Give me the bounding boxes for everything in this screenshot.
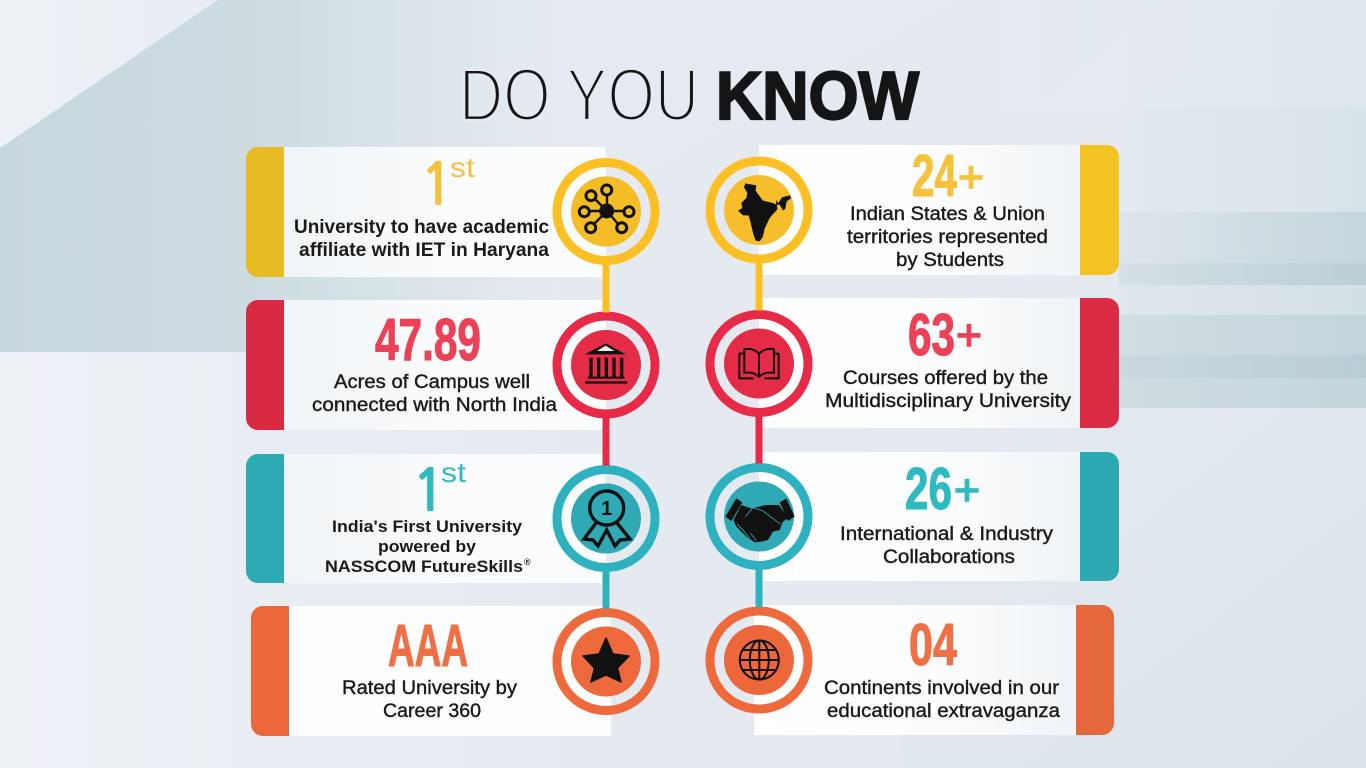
title: bold word: KNOW [716,58,920,134]
stat: 1st: 1 [411,462,447,520]
stat: 24+: 24 [912,143,957,209]
card [759,452,1089,581]
description: ® [524,557,531,567]
colour tab [246,454,284,583]
icon: award ribbon in ring [557,470,655,568]
icon: open book in ring [710,314,808,412]
card [759,145,1089,275]
description: Indian States & Union [850,203,1045,225]
description [294,216,549,261]
connector: teal left [602,572,610,608]
colour tab [251,606,289,736]
card [759,298,1089,428]
description: International & Industry [840,523,1053,545]
card [270,300,606,430]
stat: 63+: 63 [908,302,955,368]
icon: award ribbon in ring: 1 [601,498,612,520]
colour tab [246,300,284,430]
connector: yellow left [602,264,610,312]
description: Multidisciplinary University [825,390,1071,412]
stat: 04: 04 [909,612,957,678]
description [342,677,517,722]
connector: red right [756,416,762,464]
description: NASSCOM FutureSkills [325,557,523,576]
stat: 1st [411,457,466,520]
panel: acres of campus [246,300,655,430]
description [840,523,1053,568]
icon: network in ring [557,162,655,260]
stat: 26+: + [954,466,980,515]
panel: courses offered [710,298,1119,428]
connector: red left [602,418,610,466]
stat: 1st [419,152,475,214]
title [459,54,920,136]
panel: first university IET [246,147,655,277]
description: affiliate with IET in Haryana [299,239,549,261]
description [825,367,1071,412]
panel: Indian states [710,143,1119,275]
description: by Students [896,249,1004,271]
icon: star in ring [557,612,655,710]
description [312,371,557,416]
icon: institution in ring [557,316,655,414]
stat: 1st: st [450,152,475,183]
description: Career 360 [383,700,481,722]
colour tab [1076,605,1114,735]
description [847,203,1048,271]
panel: NASSCOM first university [246,454,655,583]
stat: AAA: AAA [388,613,468,679]
description: educational extravaganza [827,700,1060,722]
description: connected with North India [312,394,557,416]
description: Collaborations [883,546,1015,568]
connector: teal right [756,570,762,607]
panel: collaborations [710,452,1119,581]
description: Continents involved in our [824,677,1060,699]
description: powered by [378,537,477,556]
stat: 1st: 1 [419,156,455,214]
description: Courses offered by the [843,367,1048,389]
colour tab [1080,145,1119,275]
colour tab [1080,298,1119,428]
stat: 24+: + [958,153,984,202]
stat: 47.89: 47.89 [375,307,481,373]
description: India's First University [332,517,523,536]
icon: handshake in ring [710,468,808,566]
stat: 1st: st [441,457,466,488]
stat: 63+: + [956,311,982,360]
connector: yellow right [756,263,762,310]
description: Rated University by [342,677,517,699]
colour tab [1080,452,1119,581]
icon: India map in ring [710,161,808,259]
card [754,605,1084,735]
card [270,454,606,583]
icon: globe in ring [710,611,808,709]
description [325,517,531,576]
panel: continents [710,605,1114,735]
description: territories represented [847,226,1048,248]
description [824,677,1060,722]
card [275,606,611,736]
description: Acres of Campus well [334,371,530,393]
panel: AAA rating [251,606,655,736]
card [270,147,606,277]
colour tab [246,147,284,277]
title: light words: DO YOU [459,54,699,136]
description: University to have academic [294,216,549,238]
stat: 26+: 26 [905,456,952,522]
